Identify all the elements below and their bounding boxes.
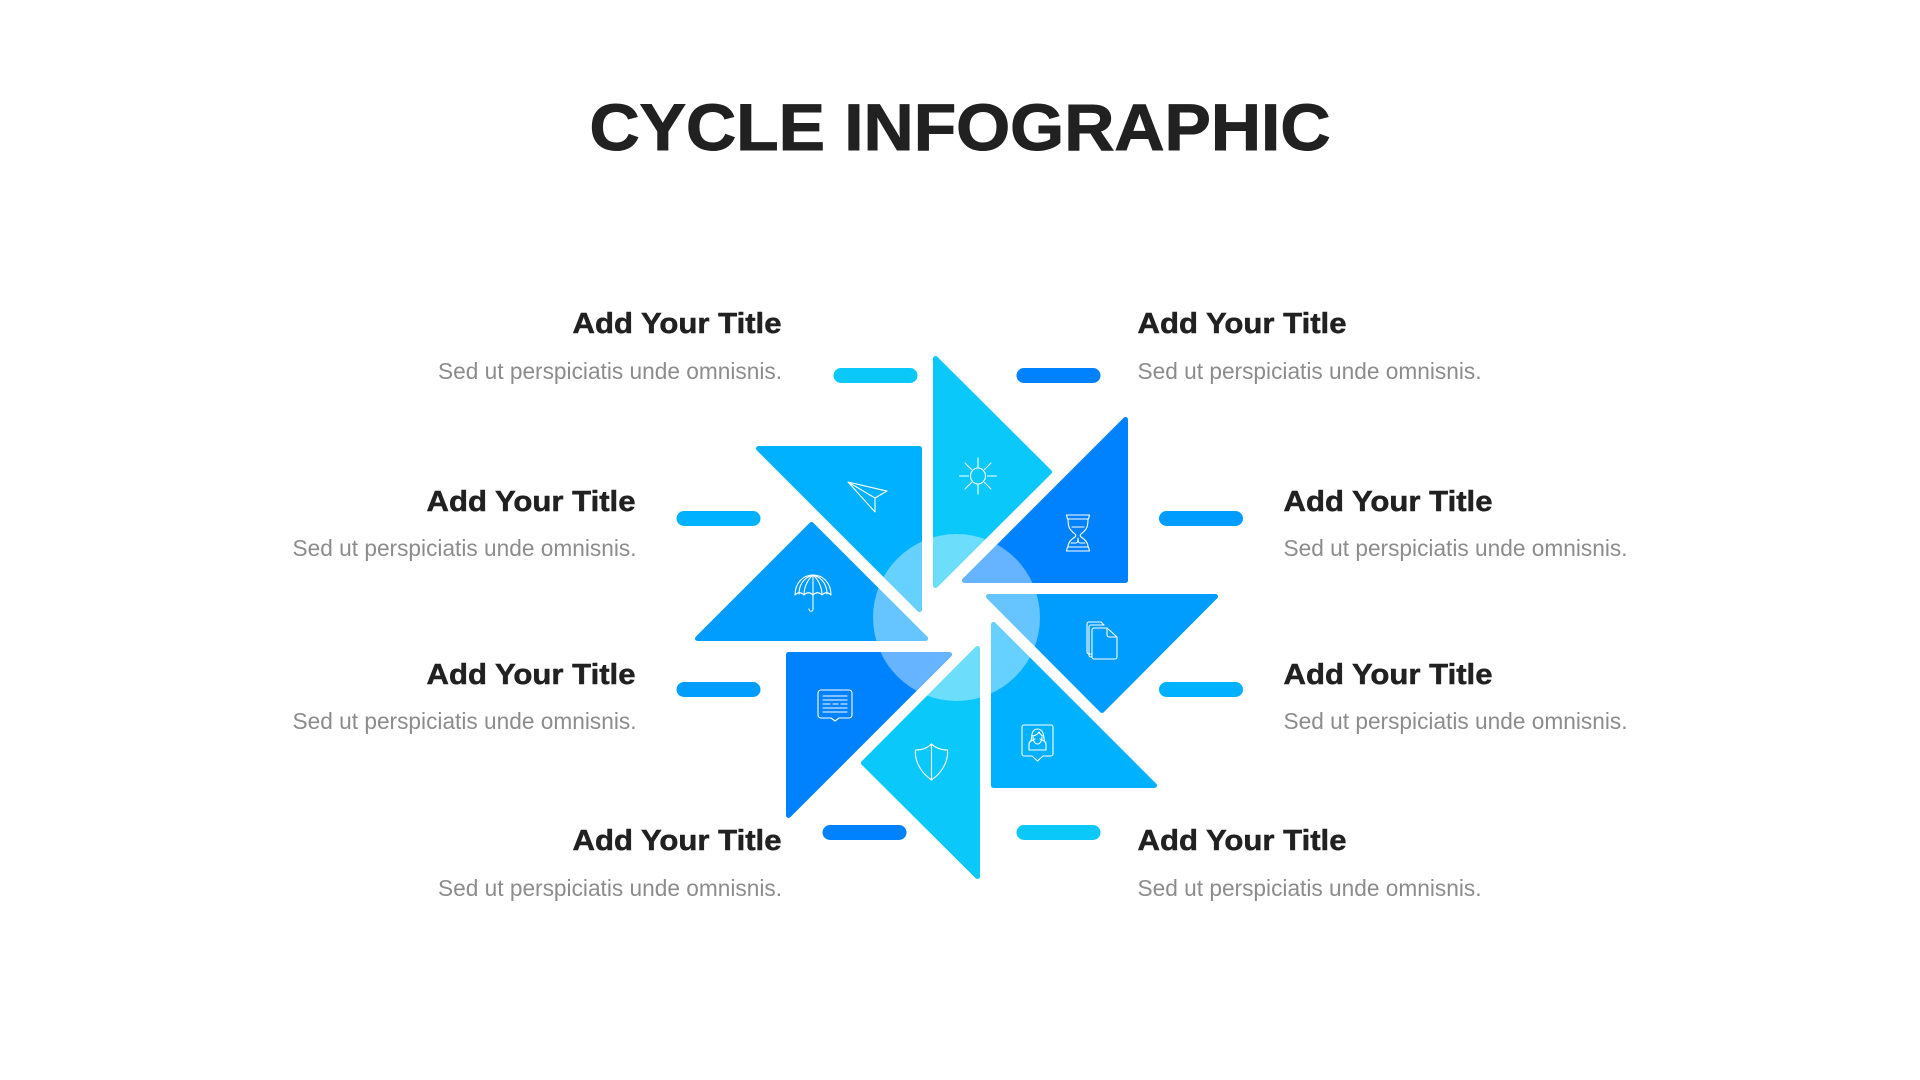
text block: top right xyxy=(1138,308,1482,384)
connector bar: upper right xyxy=(1159,511,1243,526)
icon: profile card xyxy=(1022,725,1053,761)
text block: lower left: Add Your Title xyxy=(426,659,636,691)
text block: bottom right: Sed ut perspiciatis unde omnisnis. xyxy=(1138,875,1482,901)
icon: message xyxy=(818,690,852,721)
text block: lower right: Sed ut perspiciatis unde omnisnis. xyxy=(1284,708,1628,734)
text block: upper left: Sed ut perspiciatis unde omnisnis. xyxy=(292,535,636,561)
text block: bottom left xyxy=(438,825,782,901)
text block: top left xyxy=(438,308,782,384)
text block: top left: Add Your Title xyxy=(572,308,782,340)
connector bar: bottom left xyxy=(822,825,906,840)
connector bar: lower right xyxy=(1159,682,1243,697)
connector bar: top left xyxy=(834,368,918,383)
segment: shield triangle xyxy=(864,648,978,876)
text block: upper right: Sed ut perspiciatis unde omnisnis. xyxy=(1284,535,1628,561)
connector bar: bottom right xyxy=(1016,825,1100,840)
segment: document triangle xyxy=(988,596,1216,710)
text block: lower right xyxy=(1284,659,1628,734)
icon: shield xyxy=(915,744,948,780)
text block: top right: Add Your Title xyxy=(1138,308,1346,340)
pinwheel cycle diagram xyxy=(698,358,1216,876)
connector bar: lower left xyxy=(676,682,760,697)
text block: bottom left: Add Your Title xyxy=(572,825,782,857)
text block: upper left: Add Your Title xyxy=(426,486,636,518)
connector bar: top right xyxy=(1016,368,1100,383)
text block: bottom right: Add Your Title xyxy=(1138,825,1346,857)
icon: documents xyxy=(1087,622,1117,659)
icon: hourglass xyxy=(1066,515,1090,551)
text block: lower left: Sed ut perspiciatis unde omnisnis. xyxy=(292,708,636,734)
text block: lower right: Add Your Title xyxy=(1284,659,1492,691)
icon: sun xyxy=(960,458,996,494)
segment: umbrella triangle xyxy=(698,524,926,638)
text block: bottom left: Sed ut perspiciatis unde omnisnis. xyxy=(438,875,782,901)
segment: message triangle xyxy=(788,654,950,816)
text block: upper right xyxy=(1284,486,1628,561)
text block: top left: Sed ut perspiciatis unde omnisnis. xyxy=(438,358,782,384)
segment: sun triangle xyxy=(936,358,1050,586)
text block: top right: Sed ut perspiciatis unde omnisnis. xyxy=(1138,358,1482,384)
text block: lower left xyxy=(292,659,636,734)
connector bar: upper left xyxy=(676,511,760,526)
icon: paper plane xyxy=(848,482,887,512)
segment: paper plane triangle xyxy=(758,448,920,610)
text block: upper right: Add Your Title xyxy=(1284,486,1492,518)
icon: umbrella xyxy=(795,575,831,611)
center translucent circle xyxy=(873,534,1040,701)
segment: profile triangle xyxy=(994,624,1154,786)
text block: upper left xyxy=(292,486,636,561)
text block: bottom right xyxy=(1138,825,1482,901)
title: CYCLE INFOGRAPHIC xyxy=(590,90,1330,164)
segment: hourglass triangle xyxy=(964,420,1126,580)
